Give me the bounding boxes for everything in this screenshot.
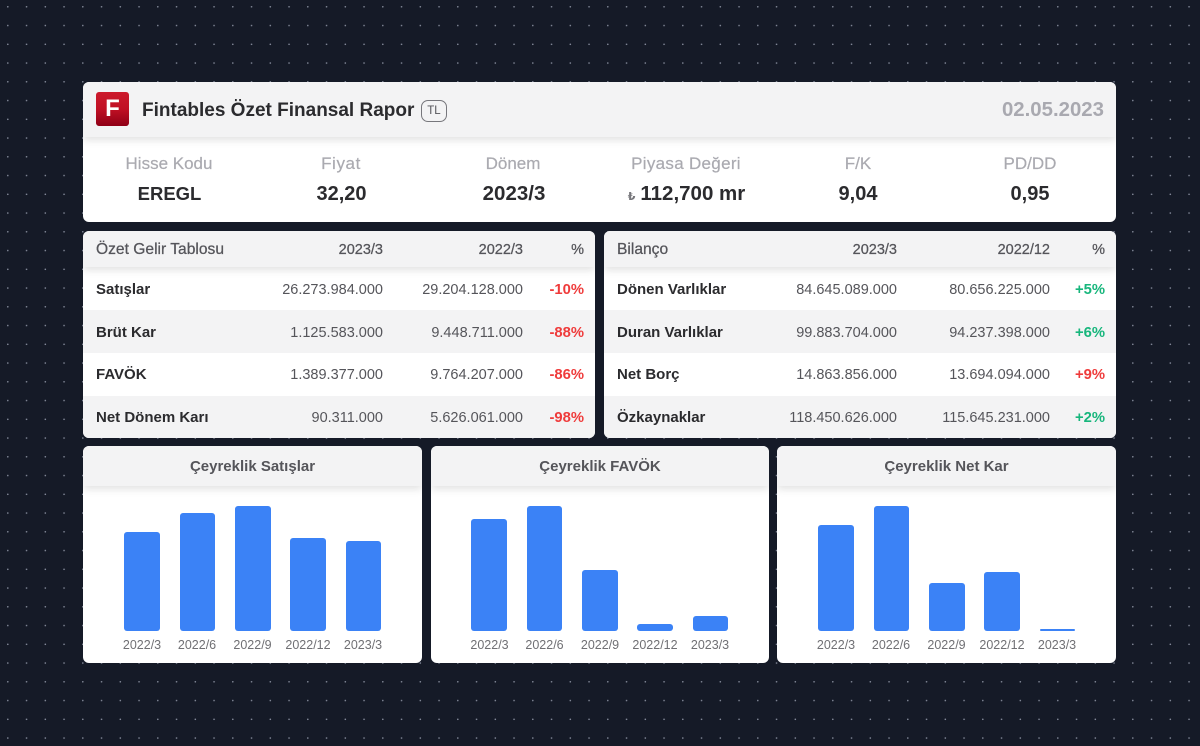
chart heading: Çeyreklik Net Kar xyxy=(884,458,1009,475)
row: Brüt Kar: -88% xyxy=(549,325,584,341)
panel: quarterly EBITDA chart xyxy=(431,446,769,663)
report date: 02.05.2023 xyxy=(1002,99,1104,121)
metric: ticker: Hisse Kodu xyxy=(126,154,212,173)
icon: Fintables logo: F xyxy=(105,95,120,122)
row: Net Dönem Karı xyxy=(83,396,595,438)
row: FAVÖK: 9.764.207.000 xyxy=(430,367,523,383)
bar chart: net profit: 2022/9 xyxy=(927,638,966,652)
row: Net Borç xyxy=(617,366,1105,383)
bar chart: sales: 2022/3 xyxy=(123,638,161,652)
row: Net Dönem Karı: 5.626.061.000 xyxy=(430,410,523,426)
panel: balance sheet xyxy=(604,231,1116,438)
metric: market cap xyxy=(628,154,745,205)
bar chart: sales: 2022/12 xyxy=(285,638,331,652)
table header xyxy=(604,231,1116,267)
metric: price xyxy=(316,154,367,205)
row: Dönen Varlıklar: +5% xyxy=(1075,282,1105,298)
row: Duran Varlıklar: Duran Varlıklar xyxy=(617,324,723,341)
table header: Özet Gelir Tablosu xyxy=(96,241,224,258)
bar chart: EBITDA: 2022/12 xyxy=(632,638,678,652)
bar chart: EBITDA: 2022/6 xyxy=(525,638,564,652)
table header: % xyxy=(1092,242,1105,258)
bar chart: net profit: 2022/3 xyxy=(817,638,855,652)
row: Dönen Varlıklar: 80.656.225.000 xyxy=(949,282,1050,298)
row: Özkaynaklar: 118.450.626.000 xyxy=(789,410,897,426)
metric: ticker: EREGL xyxy=(138,183,201,204)
chart heading xyxy=(431,446,769,486)
row: Net Borç: +9% xyxy=(1075,367,1105,383)
metric: period xyxy=(483,154,545,205)
bar chart: net profit: 2023/3 xyxy=(1038,638,1076,652)
metric: price to book: 0,95 xyxy=(1011,183,1049,205)
bar chart: EBITDA xyxy=(470,506,729,652)
metric: price to earnings: 9,04 xyxy=(839,183,877,205)
row: Dönen Varlıklar: Dönen Varlıklar xyxy=(617,281,726,298)
metric: price to earnings xyxy=(839,154,878,205)
metric: ticker xyxy=(126,154,212,204)
row: Özkaynaklar: 115.645.231.000 xyxy=(942,410,1050,426)
row: Dönen Varlıklar xyxy=(617,281,1105,298)
bar chart: net profit: 2022/12 xyxy=(979,638,1025,652)
row: Net Borç: Net Borç xyxy=(617,366,680,383)
currency badge xyxy=(421,100,447,122)
bar chart: sales: 2022/9 xyxy=(233,638,272,652)
row: Brüt Kar: Brüt Kar xyxy=(96,324,156,341)
metric: price to book: PD/DD xyxy=(1004,154,1056,173)
row: Net Borç: 14.863.856.000 xyxy=(796,367,897,383)
panel: quarterly net profit chart xyxy=(777,446,1116,663)
row: Özkaynaklar: Özkaynaklar xyxy=(617,409,705,426)
bar chart: EBITDA: 2022/3 xyxy=(470,638,509,652)
table header: Bilanço xyxy=(617,241,668,258)
table header xyxy=(83,231,595,267)
metric: period: 2023/3 xyxy=(483,182,545,205)
row: Brüt Kar: 9.448.711.000 xyxy=(431,325,523,341)
bar chart: EBITDA: 2023/3 xyxy=(691,638,729,652)
chart heading: Çeyreklik Satışlar xyxy=(190,458,315,475)
metric: price to earnings: F/K xyxy=(845,154,871,173)
row: Satışlar: 26.273.984.000 xyxy=(282,282,383,298)
bar chart: sales xyxy=(123,506,382,652)
metric: market cap: Piyasa Değeri xyxy=(631,154,741,173)
table header: 2022/3 xyxy=(479,242,523,258)
bar chart: EBITDA: 2022/9 xyxy=(581,638,619,652)
metric: market cap: ₺112,700 mr xyxy=(628,182,745,205)
bar chart: sales: 2022/6 xyxy=(178,638,216,652)
row: Satışlar xyxy=(96,281,584,298)
row: Duran Varlıklar: 94.237.398.000 xyxy=(949,325,1050,341)
row: FAVÖK: FAVÖK xyxy=(96,366,147,383)
row: Net Dönem Karı: 90.311.000 xyxy=(312,410,383,426)
panel: quarterly sales chart xyxy=(83,446,422,663)
metric: price: 32,20 xyxy=(316,183,367,205)
table header: 2023/3 xyxy=(853,242,897,258)
bar chart: sales: 2023/3 xyxy=(344,638,382,652)
table header: 2022/12 xyxy=(998,242,1050,258)
chart heading: Çeyreklik FAVÖK xyxy=(539,458,661,475)
currency badge: TL xyxy=(427,105,441,117)
row: Dönen Varlıklar: 84.645.089.000 xyxy=(796,282,897,298)
table header: 2023/3 xyxy=(339,242,383,258)
row: Brüt Kar: 1.125.583.000 xyxy=(290,325,383,341)
row: Net Borç: 13.694.094.000 xyxy=(949,367,1050,383)
row: FAVÖK: -86% xyxy=(549,367,584,383)
icon: Fintables logo xyxy=(96,92,129,126)
chart heading xyxy=(777,446,1116,486)
report title: Fintables Özet Finansal Rapor xyxy=(142,100,414,121)
row: FAVÖK: 1.389.377.000 xyxy=(290,367,383,383)
metric: price: Fiyat xyxy=(321,154,361,173)
row: Özkaynaklar: +2% xyxy=(1075,410,1105,426)
table header: % xyxy=(571,242,584,258)
metric: price to book xyxy=(1004,154,1056,205)
bar chart: net profit: 2022/6 xyxy=(872,638,910,652)
row: Duran Varlıklar xyxy=(604,310,1116,353)
row: Satışlar: 29.204.128.000 xyxy=(422,282,523,298)
row: Satışlar: Satışlar xyxy=(96,281,150,298)
row: Duran Varlıklar: 99.883.704.000 xyxy=(796,325,897,341)
report header bar xyxy=(83,82,1116,137)
row: Özkaynaklar xyxy=(604,396,1116,438)
chart heading xyxy=(83,446,422,486)
row: Duran Varlıklar: +6% xyxy=(1075,325,1105,341)
row: Net Dönem Karı: Net Dönem Karı xyxy=(96,409,209,426)
panel: report summary xyxy=(83,82,1116,222)
row: Satışlar: -10% xyxy=(549,282,584,298)
panel: income statement xyxy=(83,231,595,438)
bar chart: net profit xyxy=(817,506,1076,652)
row: FAVÖK xyxy=(96,366,584,383)
row: Brüt Kar xyxy=(83,310,595,353)
metric: period: Dönem xyxy=(486,154,540,173)
row: Net Dönem Karı: -98% xyxy=(549,410,584,426)
